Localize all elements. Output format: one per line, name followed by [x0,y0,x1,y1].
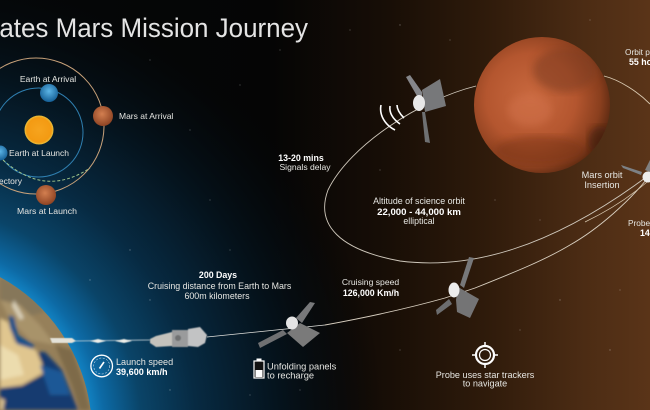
label: mars at arrival: Mars at Arrival [119,111,173,121]
mars at arrival [93,106,113,126]
earth at arrival [40,84,58,102]
land: south edge [55,345,90,410]
text: mars orbit insertion [582,170,623,190]
text: star trackers [436,370,535,388]
solar system diagram [0,58,173,216]
text: altitude of science orbit: 22,000 - 44,000 km [377,207,461,218]
icon: speed gauge [91,355,112,377]
sea: gulf [9,315,34,349]
orbit right of mars [604,76,650,104]
text: unfolding panels: to recharge [267,370,314,380]
mars at launch [36,185,56,205]
text: mars orbit insertion: Insertion [584,180,620,190]
earth at launch [0,146,8,160]
text: star trackers: to navigate [463,378,507,388]
probe: science orbit [406,75,446,143]
mars [474,37,612,173]
text: signals delay [278,153,331,172]
cruise trajectory [325,180,646,325]
land: arabian peninsula [0,318,45,388]
sun [24,116,54,144]
text: mars orbit insertion: Mars orbit [582,170,623,180]
sea: indian ocean [0,352,78,410]
earth [0,277,91,410]
land: northern tan [0,278,44,314]
text: cruising speed: Cruising speed [342,277,399,287]
rocket [150,327,207,347]
text: cruising speed: 126,000 Km/h [343,288,399,298]
text: altitude of science orbit: elliptical [403,216,435,226]
text: launch speed [116,357,173,377]
label: earth at launch: Earth at Launch [9,148,69,158]
icon: signal waves [381,105,404,130]
rocket exhaust trail [50,338,150,343]
text: unfolding panels [267,362,337,380]
label: earth at arrival: Earth at Arrival [20,74,76,84]
text: altitude of science orbit: Altitude of science orbit [373,196,465,206]
text: orbit period [625,47,650,67]
probe: cruising [436,257,479,318]
probe: orbit insertion [621,160,650,182]
icon: battery [254,358,264,378]
orbit: Mars [0,58,104,194]
text: star trackers: Probe uses star trackers [436,370,535,380]
text: 200 days: 600m kilometers [184,291,250,301]
insertion line [585,182,647,222]
trajectory dashed [3,160,90,181]
text: 200 days: Cruising distance from Earth to Mars [148,281,292,291]
text: unfolding panels: Unfolding panels [267,362,337,372]
text: 200 days [148,270,292,301]
text: 200 days: 200 Days [199,270,237,280]
text: launch speed: Launch speed [116,357,173,367]
trajectory line: rocket to probe [207,325,325,337]
icon: star tracker [472,342,498,368]
label: mars at launch: Mars at Launch [17,206,77,216]
orbit: Earth [0,88,83,177]
text: signals delay: Signals delay [279,162,331,172]
probe: unfolding panels [258,302,320,348]
text: launch speed: 39,600 km/h [116,367,168,377]
text: cruising speed [342,277,399,298]
science orbit [325,86,645,263]
text: probe speed [628,218,650,238]
text: signals delay: 13-20 mins [278,153,324,163]
text: altitude of science orbit [373,196,465,226]
